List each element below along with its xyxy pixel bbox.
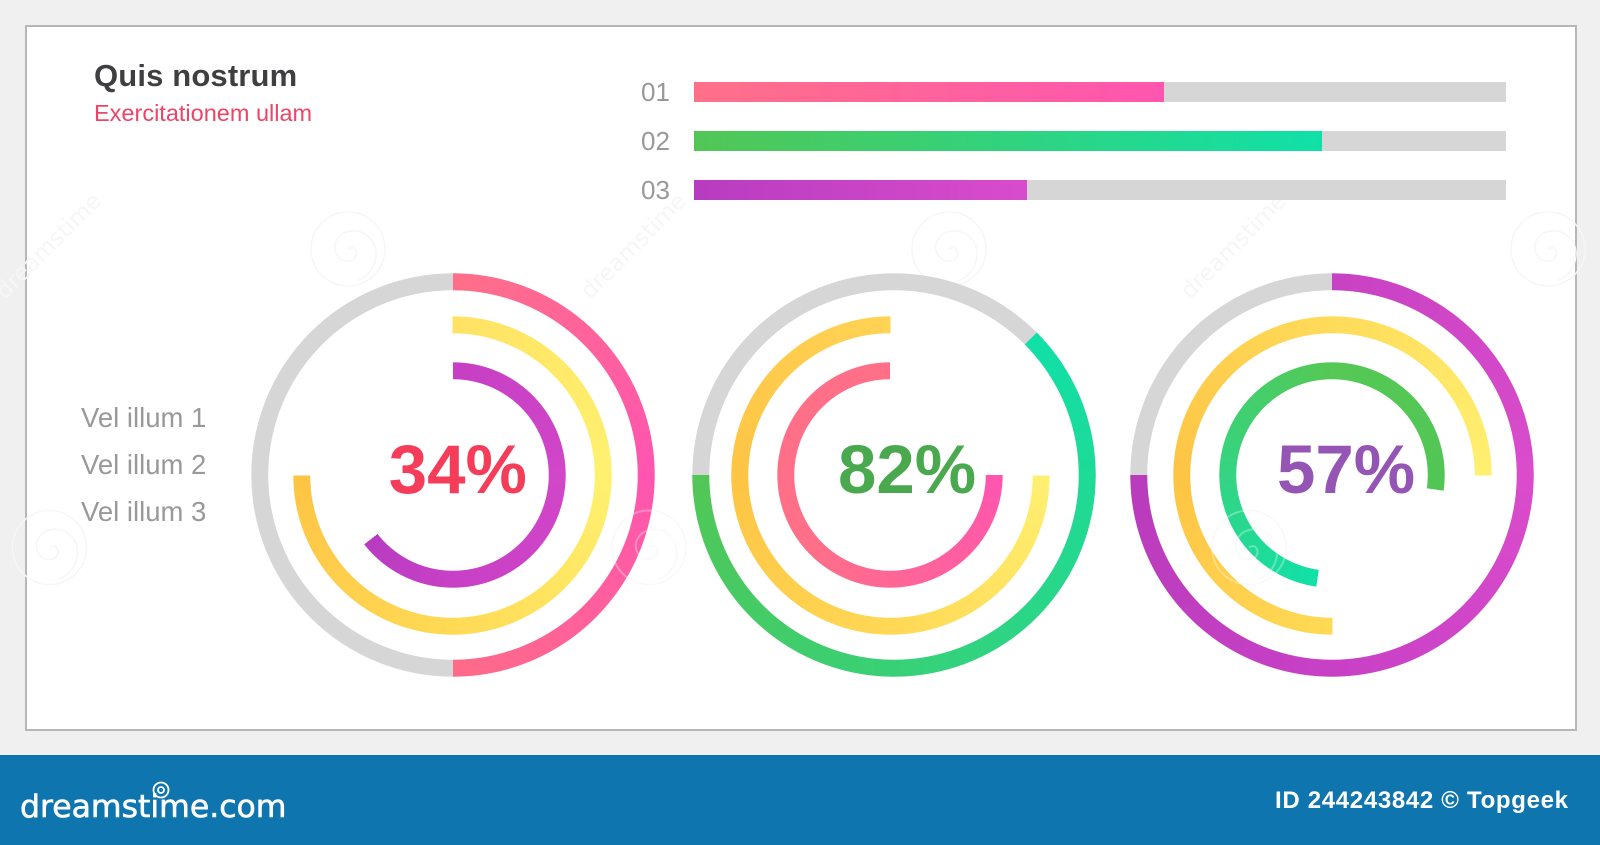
value 34%: 34%	[389, 431, 527, 508]
bar 03	[694, 180, 1506, 200]
middle arc yellow	[293, 316, 612, 635]
outer arc magenta	[1130, 273, 1534, 677]
donut chart: 57%	[1130, 273, 1534, 677]
inner arc purple	[364, 362, 566, 588]
bar 02 fill	[694, 130, 1322, 150]
legend label 3: Vel illum 3	[81, 496, 206, 527]
outer arc green	[692, 332, 1096, 677]
legend label 2: Vel illum 2	[81, 449, 206, 480]
bar 01 fill	[694, 82, 1164, 102]
bar 01	[694, 82, 1506, 102]
donut chart: 34%	[251, 273, 655, 677]
inner arc pink	[777, 362, 1003, 588]
bar label 03: 03	[641, 175, 670, 205]
bar label 02: 02	[641, 126, 670, 156]
footer logo text: dreamstime.com	[20, 789, 286, 825]
middle arc yellow	[731, 316, 1050, 635]
value 57%: 57%	[1277, 431, 1415, 508]
legend label 1: Vel illum 1	[81, 402, 206, 433]
outer track	[251, 273, 655, 677]
outer arc pink	[453, 273, 655, 677]
subtitle: Exercitationem ullam	[94, 100, 312, 126]
footer band	[0, 755, 1600, 845]
middle arc yellow	[1173, 316, 1492, 635]
inner arc green	[1219, 362, 1445, 588]
title: Quis nostrum	[94, 58, 297, 93]
footer credit: ID 244243842 © Topgeek	[1275, 786, 1569, 814]
watermark layer under charts: dreamstime	[1176, 188, 1292, 304]
bar 03 fill	[694, 180, 1027, 200]
watermark layer under charts: dreamstime	[576, 188, 692, 304]
outer track	[692, 273, 1096, 677]
donut chart: 82%	[692, 273, 1096, 677]
value 82%: 82%	[838, 431, 976, 508]
bar 02	[694, 130, 1506, 150]
bar label 01: 01	[641, 77, 670, 107]
outer track	[1130, 273, 1534, 677]
